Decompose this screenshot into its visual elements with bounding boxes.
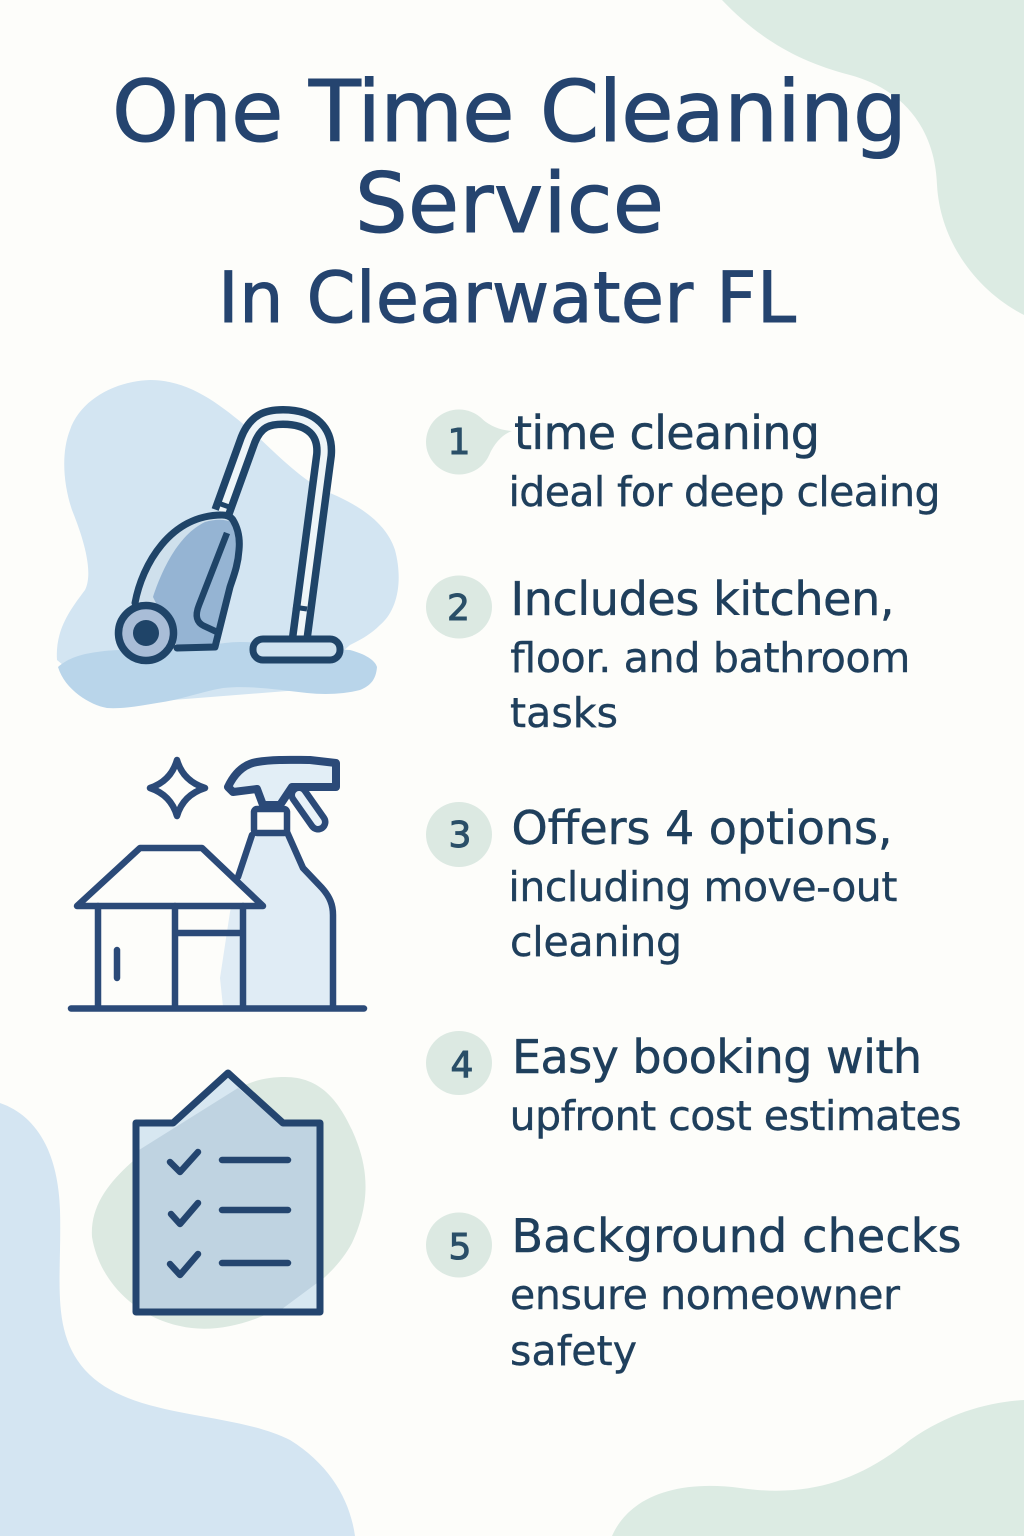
icon: vacuum cleaner	[57, 380, 399, 708]
item 1 heading: time cleaning	[514, 406, 820, 460]
number badge 5: 5	[449, 1227, 471, 1268]
item 2	[426, 572, 910, 737]
number badge 2	[426, 576, 492, 638]
number badge 2: 2	[447, 588, 470, 629]
number badge 4: 4	[451, 1045, 473, 1086]
item 4	[426, 1030, 962, 1140]
item 5	[426, 1209, 962, 1375]
icon: house and spray bottle	[71, 760, 364, 1008]
icon: checklist	[92, 1073, 366, 1329]
item 2 text	[510, 634, 910, 737]
item 5 heading: Background checks	[512, 1209, 962, 1263]
item 5 text: safety	[510, 1327, 637, 1375]
number badge 4	[426, 1031, 492, 1095]
item 3 text: cleaning	[510, 918, 682, 966]
item 1 text: ideal for deep cleaing	[508, 468, 940, 516]
item 1	[426, 406, 940, 516]
item 3	[426, 801, 897, 966]
title: Service	[355, 155, 664, 252]
number badge 5	[426, 1212, 492, 1278]
item 3 text: including move-out	[508, 863, 897, 911]
number badge 1	[426, 410, 512, 474]
number badge 3	[426, 802, 492, 867]
item 2 text: tasks	[510, 689, 618, 737]
item 3 text	[508, 863, 897, 966]
number badge 1: 1	[448, 422, 470, 463]
title: One Time Cleaning	[112, 63, 907, 162]
item 4 heading: Easy booking with	[512, 1030, 922, 1084]
item 4 text: upfront cost estimates	[510, 1092, 962, 1140]
item 3 heading: Offers 4 options,	[512, 801, 892, 855]
title	[112, 63, 907, 252]
item 2 text: floor. and bathroom	[510, 634, 910, 682]
subtitle: In Clearwater FL	[218, 257, 796, 339]
number badge 3: 3	[449, 815, 471, 856]
item 5 text: ensure nomeowner	[510, 1271, 900, 1319]
item 2 heading: Includes kitchen,	[510, 572, 894, 626]
item 5 text	[510, 1271, 900, 1375]
